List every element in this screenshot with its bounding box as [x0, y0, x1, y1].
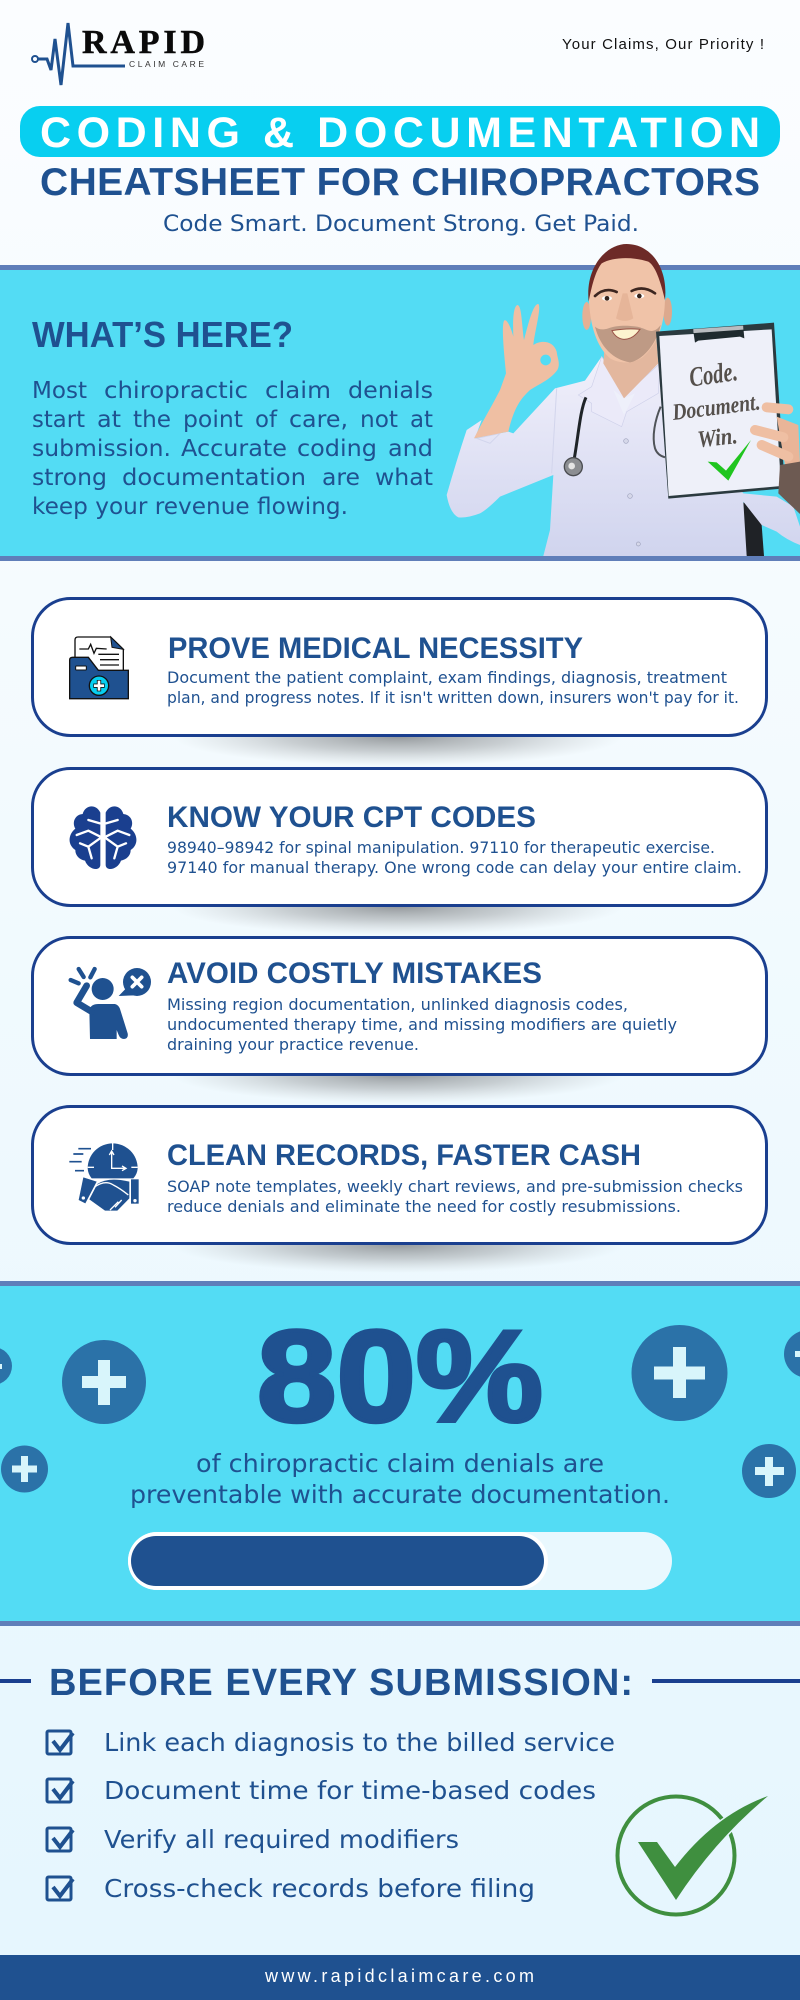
text block: intro paragraph: at — [97, 407, 121, 433]
text block: intro paragraph: strong — [32, 465, 107, 491]
heading: avoid costly mistakes: AVOID COSTLY MISTAKES — [167, 957, 542, 990]
logo: Rapid Claim Care: RAPID — [82, 24, 205, 61]
text block: intro paragraph: Accurate — [181, 436, 287, 462]
panel: prove medical necessity — [32, 598, 766, 766]
text block — [167, 995, 677, 1054]
text block: intro paragraph: at — [410, 407, 433, 433]
text block: intro paragraph: the — [133, 407, 171, 433]
text block: intro paragraph: keep your revenue flowing. — [32, 494, 348, 520]
item: link each diagnosis: Link each diagnosis to the billed service — [104, 1728, 615, 1757]
text block: reduce denials and eliminate the need for costly resubmissions. — [167, 1197, 681, 1216]
panel: know your CPT codes — [32, 768, 766, 935]
text block: intro paragraph: submission. — [32, 436, 171, 462]
heading: clean records, faster cash: CLEAN RECORDS, FASTER CASH — [167, 1139, 641, 1172]
text block: plan, and progress notes. If it isn't written down, insurers won't pay for it. — [167, 688, 739, 707]
clipboard: Win. — [696, 423, 739, 453]
item: cross-check records: Cross-check records before filing — [104, 1874, 535, 1903]
heading: prove medical necessity: PROVE MEDICAL NECESSITY — [168, 632, 583, 665]
tagline: Your Claims, Our Priority ! — [562, 36, 764, 53]
text block: Missing region documentation, unlinked diagnosis codes, — [167, 995, 628, 1014]
item: verify modifiers: Verify all required modifiers — [104, 1825, 459, 1854]
text block: SOAP note templates, weekly chart reviews, and pre-submission checks — [167, 1177, 743, 1196]
icon: medical folder — [70, 637, 128, 699]
text block: statistic caption — [130, 1449, 670, 1509]
stethoscope — [564, 397, 665, 476]
heading: before every submission: BEFORE EVERY SUBMISSION: — [49, 1662, 633, 1704]
clipboard — [656, 323, 785, 499]
title banner: Coding & Documentation: CODING & DOCUMENTATION — [40, 109, 760, 157]
text block: draining your practice revenue. — [167, 1035, 419, 1054]
text block: statistic caption: of chiropractic claim denials are — [196, 1449, 604, 1478]
text block: intro paragraph: chiropractic — [104, 378, 248, 404]
text block: intro paragraph: denials — [348, 378, 433, 404]
text block: intro paragraph: care, — [289, 407, 348, 433]
text block: 98940–98942 for spinal manipulation. 97110 for therapeutic exercise. — [167, 838, 715, 857]
icon: clock and handshake — [69, 1143, 139, 1211]
heading: know your CPT codes: KNOW YOUR CPT CODES — [167, 801, 536, 834]
logo: Rapid Claim Care — [32, 23, 205, 85]
text block: intro paragraph: what — [375, 465, 433, 491]
text block: intro paragraph: documentation — [122, 465, 306, 491]
text block: intro paragraph: are — [322, 465, 360, 491]
text block: Document the patient complaint, exam findings, diagnosis, treatment — [167, 668, 727, 687]
text block: statistic caption: preventable with accurate documentation. — [130, 1480, 670, 1509]
chart: progress bar 80% — [128, 1532, 672, 1590]
text block: intro paragraph: coding — [297, 436, 377, 462]
heading: cheatsheet for chiropractors: CHEATSHEET FOR CHIROPRACTORS — [40, 161, 760, 204]
panel: what's here — [0, 244, 800, 561]
text block: undocumented therapy time, and missing modifiers are quietly — [167, 1015, 677, 1034]
subtitle: Code Smart. Document Strong. Get Paid. — [163, 212, 639, 237]
text block: intro paragraph — [32, 378, 433, 520]
icons: decorative plus circles — [0, 1325, 800, 1498]
icon: green check in circle — [618, 1796, 768, 1914]
clipboard: Code. — [687, 356, 740, 394]
illustration: doctor holding clipboard — [447, 244, 800, 556]
text block: intro paragraph: claim — [265, 378, 331, 404]
item: document time: Document time for time-based codes — [104, 1776, 596, 1805]
text block: intro paragraph: of — [255, 407, 278, 433]
text block: intro paragraph: Most — [32, 378, 87, 404]
text block: intro paragraph: start — [32, 407, 85, 433]
panel: avoid costly mistakes — [32, 938, 766, 1103]
icon: brain — [70, 806, 136, 869]
icon: frustrated person — [71, 968, 151, 1039]
heading: what's here: WHAT’S HERE? — [32, 314, 293, 355]
text block: intro paragraph: not — [360, 407, 398, 433]
big number: 80%: 80% — [257, 1303, 543, 1449]
panel: clean records, faster cash — [32, 1106, 766, 1273]
panel: 80% statistic — [0, 1281, 800, 1626]
checklist — [47, 1728, 615, 1903]
footer: website — [0, 1955, 800, 2000]
text block: 97140 for manual therapy. One wrong code can delay your entire claim. — [167, 858, 742, 877]
text block — [167, 668, 739, 707]
logo: Rapid Claim Care: CLAIM CARE — [129, 59, 204, 69]
clipboard: Document. — [670, 389, 762, 426]
text block — [167, 838, 742, 877]
text block — [167, 1177, 743, 1216]
text block: intro paragraph: point — [183, 407, 243, 433]
text block: intro paragraph: and — [388, 436, 433, 462]
footer: website: www.rapidclaimcare.com — [264, 1966, 534, 1986]
